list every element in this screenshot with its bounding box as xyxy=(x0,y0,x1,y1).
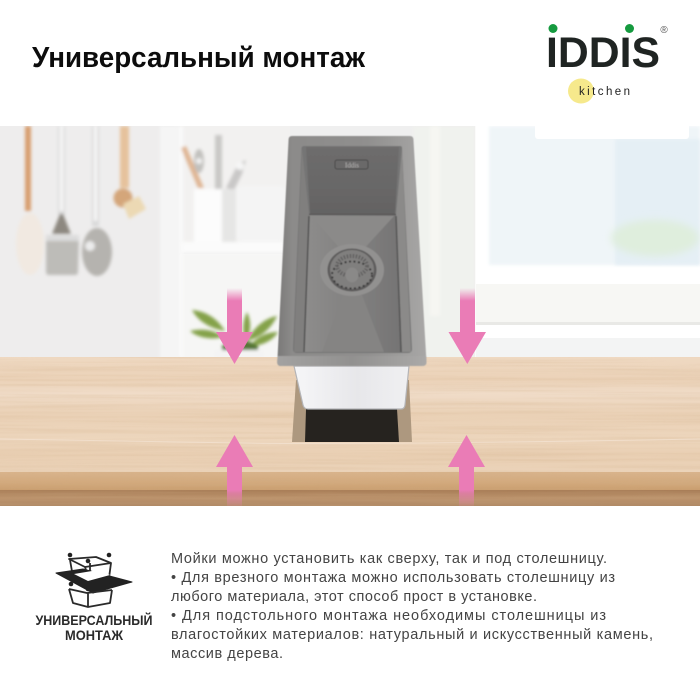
logo: kitchen: kitchen xyxy=(579,86,630,98)
arrow: down left xyxy=(216,288,253,364)
title: Универсальный монтаж xyxy=(32,42,366,74)
window xyxy=(475,124,700,358)
icon: countertop plate xyxy=(56,569,132,593)
plant xyxy=(190,310,278,358)
description text: влагостойких материалов: натуральный и искусственный камень, xyxy=(171,627,653,643)
sink body xyxy=(294,366,409,409)
icon caption: МОНТАЖ xyxy=(65,628,124,643)
icon: universal mounting xyxy=(56,553,132,607)
logo: green dot left xyxy=(548,24,558,33)
hanging utensils xyxy=(16,126,146,276)
sink back wall xyxy=(306,147,399,214)
arrow: up right xyxy=(448,435,485,506)
countertop xyxy=(0,357,700,506)
icon: plate opening xyxy=(74,570,110,581)
sink top xyxy=(277,136,426,366)
icon: upper basin xyxy=(69,557,111,578)
sink left wall xyxy=(294,158,308,352)
logo: green dot right xyxy=(625,24,634,33)
shelf with cup and dishes xyxy=(180,134,283,254)
sink rim xyxy=(277,136,426,366)
icon caption: УНИВЕРСАЛЬНЫЙ xyxy=(36,613,152,628)
counter lower edge xyxy=(0,490,700,506)
icon caption xyxy=(36,613,152,643)
description text: любого материала, этот способ прост в установке. xyxy=(171,589,537,605)
photo: kitchen scene xyxy=(0,124,700,506)
description text: массив дерева. xyxy=(171,646,283,662)
description text: • Для врезного монтажа можно использовать столешницу из xyxy=(171,570,615,586)
description text xyxy=(171,551,653,662)
logo wordmark: IDDIS xyxy=(546,29,660,77)
description text: Мойки можно установить как сверху, так и под столешницу. xyxy=(171,551,607,567)
background wall xyxy=(0,126,475,357)
drain xyxy=(320,244,384,296)
description text: • Для подстольного монтажа необходимы столешницы из xyxy=(171,608,606,624)
arrow: up left xyxy=(216,435,253,506)
sink logo badge: Iddis xyxy=(345,162,359,170)
sink shadows xyxy=(304,216,309,352)
sink basin xyxy=(293,146,412,353)
logo: yellow spot xyxy=(568,78,594,104)
icon: lower basin xyxy=(69,589,112,607)
arrow: down right xyxy=(448,288,486,364)
sink right wall xyxy=(396,148,411,352)
sink logo badge xyxy=(335,160,368,170)
counter cutout xyxy=(292,380,412,442)
counter front edge xyxy=(0,472,700,490)
logo: IDDIS kitchen xyxy=(546,24,668,104)
sink floor xyxy=(304,214,369,352)
icon: pins xyxy=(68,553,113,591)
logo: registered mark: ® xyxy=(660,25,668,36)
